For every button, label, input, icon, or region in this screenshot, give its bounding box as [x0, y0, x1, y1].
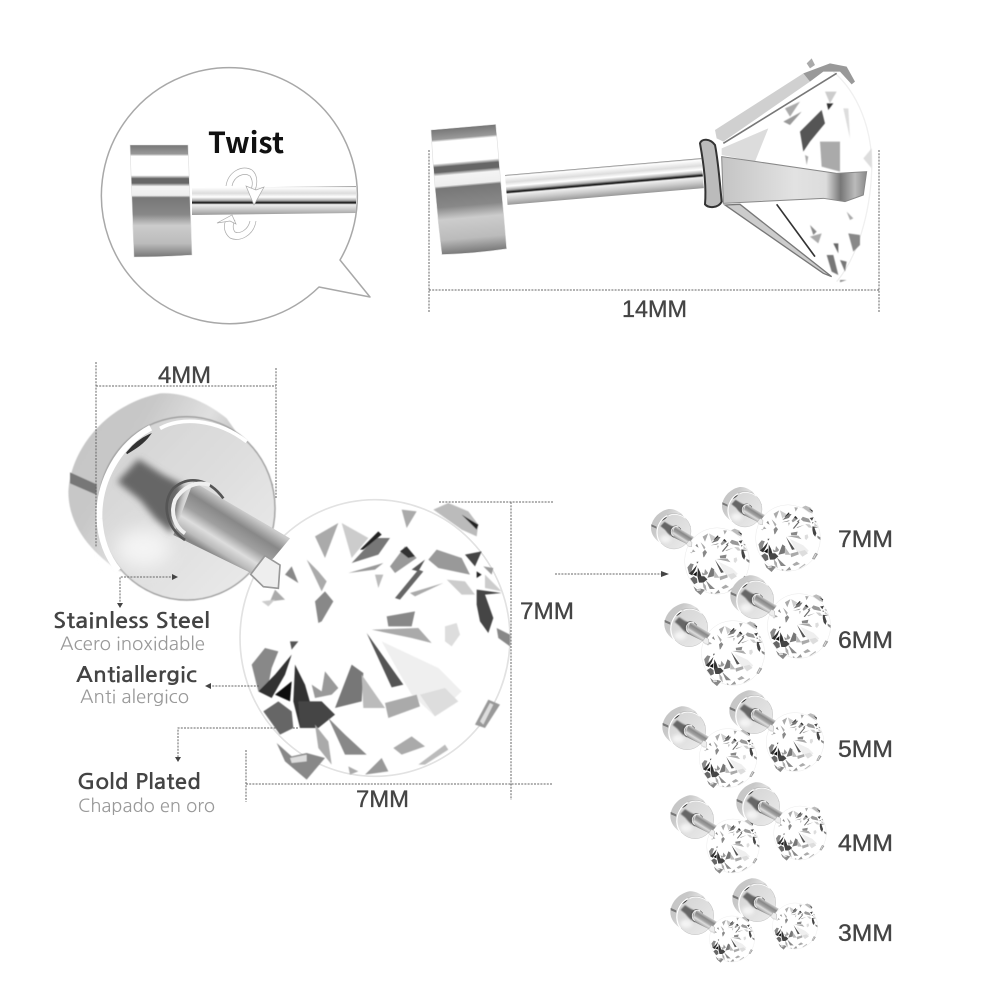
size range: 5MM: 5MM — [838, 736, 893, 763]
size range: 4MM: 4MM — [838, 830, 893, 857]
dimension: 7MM width — [246, 750, 553, 813]
callout: gold plated: Chapado en oro — [78, 797, 215, 815]
size range: 4MM — [670, 782, 893, 874]
large earring with dimensions — [68, 362, 574, 813]
dimension: 14MM — [429, 150, 879, 323]
dimension: 14MM: 14MM — [622, 296, 687, 323]
callout: antiallergic: Antiallergic — [76, 665, 197, 686]
dimension: 7MM height: 7MM — [520, 598, 574, 625]
side gem — [783, 72, 872, 282]
back disc of the screw — [130, 145, 192, 257]
gem facets — [783, 92, 872, 282]
threaded rod — [192, 186, 356, 215]
screw back and post — [68, 393, 290, 600]
dimension: 4MM: 4MM — [158, 362, 211, 389]
callout: stainless steel — [53, 574, 210, 653]
dimension: 7MM height — [439, 502, 574, 800]
speech bubble: twist detail — [101, 68, 370, 324]
size range: 7MM — [651, 487, 893, 595]
dimension: 4MM — [96, 362, 276, 547]
large gem — [240, 500, 510, 780]
prong setting — [700, 58, 867, 277]
side view of earring — [429, 58, 879, 323]
callout: stainless steel: Stainless Steel — [53, 611, 210, 632]
screw back disc — [430, 124, 507, 256]
size range: 3MM — [670, 878, 893, 963]
callout: antiallergic: Anti alergico — [80, 688, 189, 706]
callout: gold plated — [77, 728, 298, 815]
post — [505, 158, 704, 205]
callout: antiallergic — [76, 665, 260, 706]
icon: rotation arrows — [217, 168, 264, 239]
dimension: 7MM width: 7MM — [356, 786, 409, 813]
heading: Twist: Twist — [208, 120, 284, 162]
size range: 6MM — [664, 575, 893, 686]
callout: stainless steel: Acero inoxidable — [60, 635, 205, 653]
arrow to size range — [555, 571, 669, 577]
callout: gold plated: Gold Plated — [77, 772, 201, 793]
material callouts — [53, 574, 298, 815]
bubble outline — [101, 68, 370, 324]
size range: 7MM: 7MM — [838, 526, 893, 553]
size range: 5MM — [662, 690, 893, 788]
size range: 6MM: 6MM — [838, 627, 893, 654]
size range: 3MM: 3MM — [838, 920, 893, 947]
